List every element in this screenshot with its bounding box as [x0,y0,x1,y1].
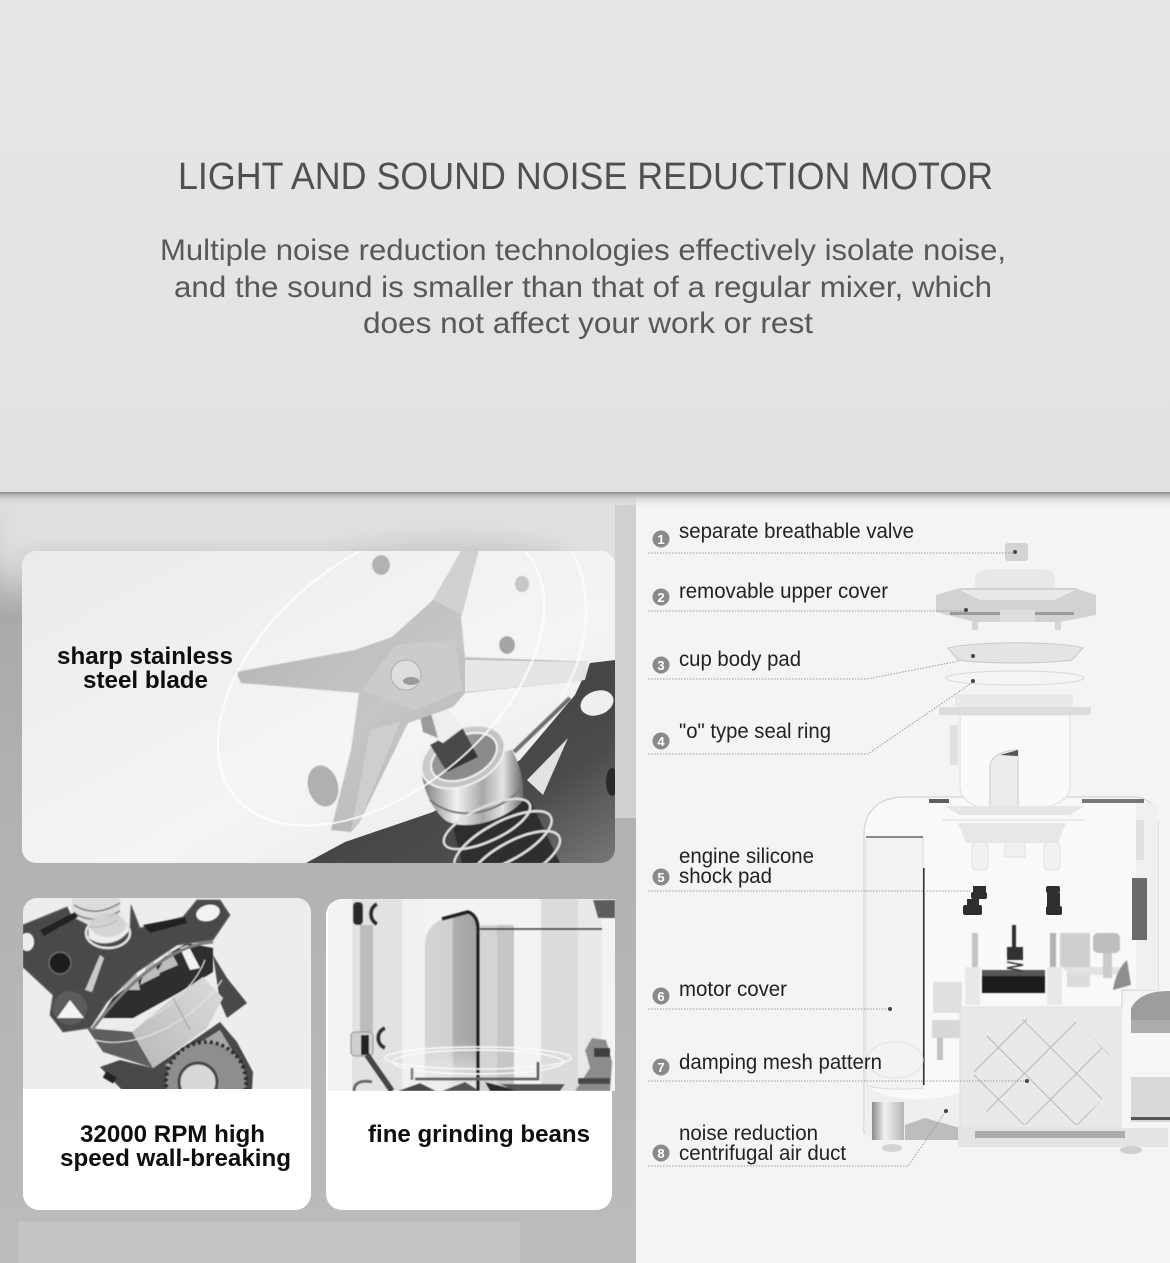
header background [0,0,1170,493]
number badges: 7 [657,1060,665,1075]
left background panel [0,493,636,1263]
subtitle: Multiple noise reduction technologies effectively isolate noise, [160,234,1006,267]
damping mesh [974,1019,1110,1125]
subtitle [160,234,1006,340]
card label: 32000 RPM high [80,1121,265,1148]
cup body pad [948,643,1083,663]
card: motor speed [20,898,311,1210]
subtitle: does not affect your work or rest [363,307,814,340]
bearing and spring [420,714,562,863]
blender base housing [864,797,1168,1154]
callout lines [648,553,1027,1166]
upper bracket [23,900,230,1032]
card label [60,1121,291,1172]
number badges: 6 [657,989,665,1004]
seal ring [946,671,1084,685]
right mechanism [575,1038,612,1091]
card label [57,643,233,694]
stator [87,1028,153,1068]
motor internals [932,925,1131,1060]
number badges: 2 [657,590,665,605]
callout labels: noise reduction [679,1122,818,1145]
motor cover box [960,1007,1122,1128]
card label: fine grinding beans [368,1121,590,1148]
removable upper cover [936,569,1096,630]
number badges [652,530,670,1162]
glass bands [352,899,402,1091]
callout labels: "o" type seal ring [679,720,831,743]
number badges: 3 [657,658,665,673]
lower housing and fan [100,1022,253,1090]
card label: steel blade [83,667,208,694]
blender jar [939,694,1091,815]
header shadow [0,492,1170,506]
bottom blades [367,1055,392,1091]
spring [72,898,120,926]
number badges: 5 [657,870,665,885]
right background panel [636,493,1170,1263]
clips [353,902,363,925]
number badges: 8 [657,1146,665,1161]
card label: speed wall-breaking [60,1145,291,1172]
lower cup mount [942,820,1085,870]
inner sheath [425,912,478,1091]
callout labels: separate breathable valve [679,520,914,543]
callout labels: cup body pad [679,648,801,671]
callout labels: damping mesh pattern [679,1051,882,1074]
breathable valve [1005,543,1028,561]
shock pads [963,886,1062,915]
motor bracket [306,660,618,863]
motor illustration [23,898,254,1089]
exploded blender diagram [864,543,1170,1154]
callout labels: motor cover [679,978,787,1001]
callout labels: engine silicone [679,845,814,868]
jar illustration [351,899,615,1091]
card: stainless steel blade [22,551,615,863]
hub bolt [391,660,421,690]
callout labels: centrifugal air duct [679,1142,846,1165]
callout labels: shock pad [679,865,772,888]
number badges: 1 [657,532,665,547]
disc holes [303,555,529,810]
glass ring [385,1047,571,1074]
card label: sharp stainless [57,643,233,670]
disc rim [216,551,546,826]
callout labels [679,520,914,1165]
callout dots [888,550,1029,1113]
side jug [1122,990,1170,1128]
blade [236,522,588,832]
title: LIGHT AND SOUND NOISE REDUCTION MOTOR [178,156,993,198]
subtitle: and the sound is smaller than that of a regular mixer, which [174,271,992,304]
number badges: 4 [657,734,665,749]
card: grinding beans [326,899,615,1210]
rotor [100,943,213,1018]
callout labels: removable upper cover [679,580,888,603]
